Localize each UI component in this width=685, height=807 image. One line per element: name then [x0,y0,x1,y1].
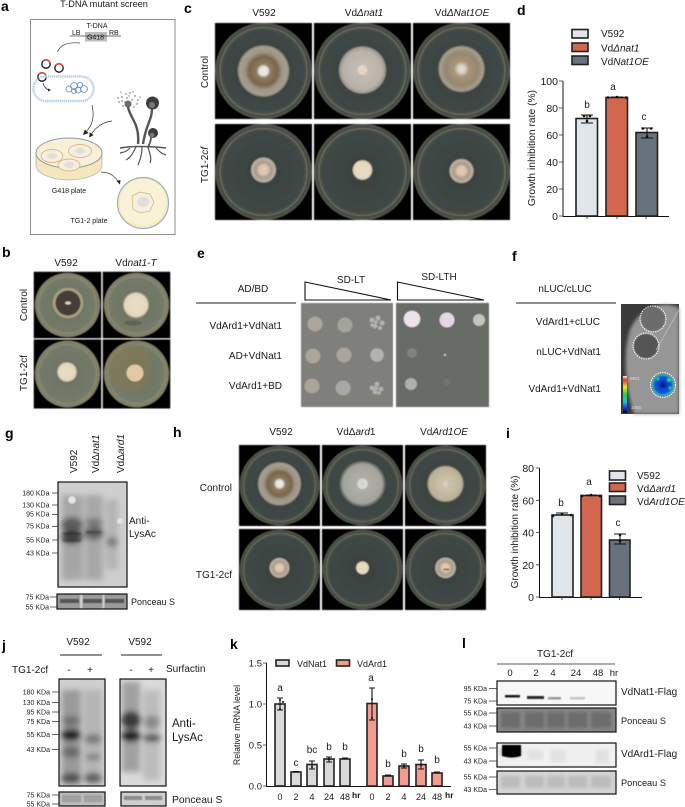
row labels: TG1-2cf [200,146,211,183]
panel label j: j [1,637,6,653]
T-DNA construct [70,23,121,42]
axes: 100 [540,76,558,88]
SD-LT plate [301,303,393,407]
panel label g: g [5,425,14,441]
significance letters: b [401,749,407,760]
significance letters: a [368,673,374,684]
group headers: V592 [128,637,152,648]
column labels: VdΔnat1 [345,8,383,19]
panel j: TG1-2cf and surfactin blots [1,637,223,807]
significance letters: a [586,477,592,488]
axes: 0 [528,592,534,604]
axes: 80 [546,103,558,115]
time labels: 0 [277,792,283,802]
axes: 0.0 [249,782,262,792]
panel label i: i [506,425,510,441]
plate images [214,21,512,222]
lane labels: VdΔnat1 [91,435,102,473]
group headers: V592 [66,637,90,648]
row labels: VdArd1+VdNat1 [209,321,282,332]
marker labels: 95 KDa [27,710,50,716]
icon: G418 petri dish [36,138,102,180]
axes: 60 [546,130,558,142]
time labels: hr [445,790,454,800]
significance letters: b [434,755,440,766]
blot frame [58,482,127,587]
blot: Ponceau S 2 [497,771,616,794]
axes [232,658,451,792]
column labels: V592 [252,8,276,19]
significance letters: b [418,744,424,755]
panel d: growth inhibition bar chart [517,2,669,223]
time labels: 48 [340,792,350,802]
row labels: nLUC+VdNat1 [536,347,601,358]
legend: VdNat1OE [601,57,649,68]
time labels: 24 [324,792,334,802]
label: G418 plate: G418 plate [52,188,86,195]
row labels: Control [200,483,232,494]
axes: 1.0 [249,700,262,710]
axes: Relative mRNA level [232,685,242,765]
blot labels: VdArd1-Flag [621,749,677,760]
significance letters: a [610,82,616,93]
Ponceau S strips: Ponceau S [172,795,223,806]
legend: VdNat1 [297,659,327,669]
marker labels [22,490,58,558]
significance letters: c [616,518,620,529]
label Anti-LysAc: Anti- [129,516,150,527]
axes: 1.5 [249,658,262,670]
row labels: AD+VdNat1 [229,351,282,362]
time labels [507,668,618,679]
AD/BD header: AD/BD [238,284,268,295]
error bars [277,688,440,775]
axes: 20 [546,184,558,196]
blot labels: Ponceau S [621,716,666,726]
label: TG1-2 plate: TG1-2 plate [71,218,108,225]
leaf luminescence image: 9931 [630,376,641,381]
label Anti-LysAc: LysAc [129,529,156,540]
dilution wedges [305,282,484,300]
time labels: 4 [309,792,315,802]
marker labels: 55 KDa [27,732,50,739]
significance letters: b [326,742,332,753]
row labels: TG1-2cf [196,570,232,581]
axes: 80 [522,463,534,475]
row labels [19,289,30,391]
TG1-2cf header: TG1-2cf [537,649,573,660]
bars [552,496,630,597]
significance letters: b [558,498,564,509]
bars VdArd1 [367,704,442,786]
schematic frame [30,20,175,234]
significance letters: b [385,759,391,770]
blot frame [120,679,166,786]
marker labels: 55 KDa [464,746,487,752]
significance letters [584,82,646,123]
label Anti-LysAc: LysAc [172,732,203,744]
column labels: VdΔard1 [337,427,376,438]
blot labels [621,687,677,788]
marker labels: 75 KDa [26,524,50,530]
legend: V592 [637,471,661,482]
Ponceau S strip: Ponceau S [131,597,175,607]
significance letters: c [642,112,646,123]
blot: TG1-2cf [60,680,104,786]
marker labels [464,686,497,794]
panel k: relative mRNA bar chart [230,636,454,802]
significance letters: b [584,100,590,111]
treatment labels: Surfactin [166,664,205,675]
panel g: Anti-LysAc western blot [5,425,175,612]
Ponceau S strips [27,792,223,807]
time labels: hr [352,790,361,800]
panel label k: k [230,636,238,652]
marker labels: 95 KDa [26,512,50,518]
significance letters: b [342,742,348,753]
label Anti-LysAc [129,516,156,540]
panel i: growth inhibition bar chart [506,425,685,604]
row labels: VdArd1+BD [229,381,282,392]
treatment labels: TG1-2cf [12,665,48,676]
row labels: VdArd1+cLUC [536,317,600,328]
axes [527,76,669,223]
panel e: yeast two hybrid [196,245,489,407]
lane labels [69,434,127,473]
panel label d: d [517,2,526,18]
column labels: V592 [269,427,293,438]
axes: 40 [522,528,534,540]
bars [576,98,658,216]
axes: 20 [522,560,534,572]
axes: 60 [522,495,534,507]
legend [572,29,649,68]
axes [510,463,642,604]
SD-LTH plate [396,303,489,407]
time labels: 2 [293,792,299,802]
T-DNA construct: T-DNA [86,23,108,30]
row labels: VdArd1+VdNat1 [528,384,601,395]
marker labels: 55 KDa [26,538,50,544]
panel label e: e [197,245,205,261]
treatment labels: - [129,665,133,676]
marker labels: 43 KDa [464,724,487,730]
SD labels: SD-LT [337,275,365,286]
time labels [277,790,454,802]
legend [610,471,685,508]
TG1-2cf header [497,649,615,664]
row labels [209,321,282,392]
axes: 0.5 [249,740,262,752]
arrow: construct to plasmids [58,43,80,52]
panel a: T-DNA mutant screen [1,0,175,234]
time labels: 0 [507,668,513,679]
column labels [252,8,490,19]
row labels [528,317,601,395]
icon: Verticillium fungus [117,91,166,165]
significance letters: a [277,683,283,694]
time labels: 48 [593,668,603,679]
column labels [269,427,468,438]
nLUC/cLUC header: nLUC/cLUC [538,284,592,295]
axes: 0 [552,211,558,223]
treatment labels: + [148,665,154,676]
time labels: 4 [550,668,556,679]
row labels: Control [200,56,211,88]
column labels: VdArd1OE [420,427,468,438]
significance letters [277,673,440,770]
panel c: Nat1 plates [184,0,512,222]
bars VdNat1 [275,704,350,786]
marker labels: 75 KDa [464,698,487,706]
marker labels: 55 KDa [464,710,487,718]
significance letters [558,477,620,529]
plate images [238,444,487,611]
row labels [196,483,232,581]
icon: TG1-2 plate [118,178,168,228]
treatment labels: + [87,665,93,676]
leaf luminescence image: 1086 [631,405,642,410]
column labels: VdΔNat1OE [435,8,490,19]
marker labels: 55 KDa [464,774,487,782]
marker labels: 75 KDa [27,719,50,726]
error bars [581,96,653,138]
T-DNA construct: LB [72,30,81,37]
marker labels: 43 KDa [464,787,487,794]
group headers [60,637,162,655]
column labels: V592 [54,258,78,269]
Ponceau S strip [26,594,175,612]
legend: VdArd1OE [637,497,685,508]
treatment labels [12,664,205,676]
blot labels: Ponceau S [621,778,666,788]
axes: Growth inhibition rate (%) [510,476,521,588]
row labels: TG1-2cf [19,355,30,391]
significance letters: bc [307,745,317,756]
arrows to plate [84,105,112,137]
error bars [552,494,626,544]
nLUC/cLUC header [516,284,616,303]
time labels: 24 [416,792,426,802]
panel b: Vdnat1-T plates [2,244,170,408]
blot labels: VdNat1-Flag [621,687,677,698]
column labels: Vdnat1-T [115,258,157,269]
significance letters: c [294,758,298,769]
marker labels: 180 KDa [23,690,50,696]
time labels: hr [610,668,618,679]
blot image [58,482,126,586]
marker labels: 43 KDa [26,550,50,558]
column labels [54,258,157,269]
time labels: 24 [571,668,581,679]
panel l: time-course blots [462,635,677,794]
AD/BD header [196,284,296,303]
blot: VdArd1-Flag [497,743,616,767]
axes: 40 [546,157,558,169]
legend: VdΔnat1 [601,44,639,54]
T-DNA construct: G418 [87,34,104,42]
panel label h: h [173,424,182,440]
leaf luminescence image [621,304,679,414]
Ponceau S strip: 75 KDa [26,594,49,602]
label Anti-LysAc: Anti- [172,718,196,730]
lane labels: V592 [69,449,80,473]
treatment labels: - [67,665,71,676]
SD labels [337,272,457,286]
row labels [200,56,211,183]
Ponceau S strips: 75 KDa [27,792,50,800]
time labels: 4 [401,792,407,802]
time labels: 0 [369,792,375,802]
marker labels: 43 KDa [464,758,487,766]
panel label c: c [184,0,192,16]
plate images [34,272,170,408]
marker labels: 43 KDa [27,747,50,754]
Ponceau S strip: 55 KDa [26,604,49,612]
plasmids [38,60,63,81]
marker labels: 95 KDa [464,686,487,693]
panel f: luciferase assay [512,248,679,414]
marker labels: 130 KDa [23,700,50,707]
label Anti-LysAc [172,718,203,744]
row labels: Control [19,289,30,321]
agrobacterium cell with DNA [34,76,94,101]
panel h: Ard1 plates [173,424,487,611]
panel label b: b [2,244,11,260]
marker labels: 130 KDa [22,502,50,510]
time labels: 2 [533,668,539,679]
lane labels: VdΔard1 [116,434,127,473]
blot frame [59,679,105,786]
legend [276,659,387,669]
panel label l: l [462,635,466,651]
axes: Growth inhibition rate (%) [527,90,538,206]
panel label f: f [512,248,517,264]
legend: V592 [601,29,625,40]
SD labels: SD-LTH [421,272,457,283]
blot: VdNat1-Flag [497,681,616,705]
T-DNA construct: RB [109,30,119,37]
blot: Ponceau S 1 [497,708,616,732]
arrow: to TG1-2 plate [101,172,120,184]
marker labels: 180 KDa [22,490,50,498]
time labels: 48 [432,792,442,802]
marker labels [23,690,59,754]
blot: surfactin [120,680,166,786]
legend: VdArd1 [357,659,387,669]
legend: VdΔard1 [637,484,676,495]
time labels: 2 [385,792,391,802]
